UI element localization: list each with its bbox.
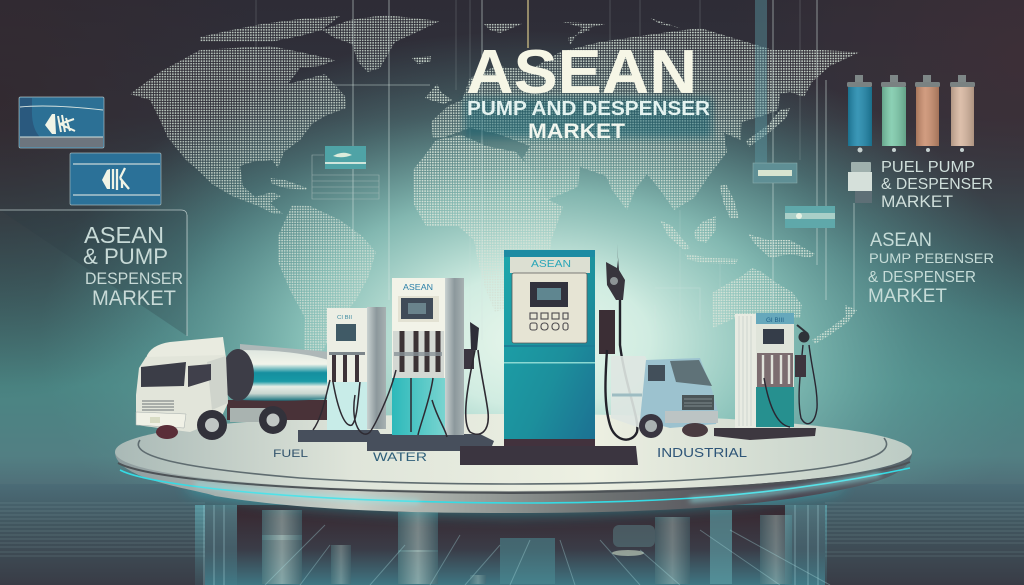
brand plate: ASEAN <box>403 282 433 292</box>
round platform <box>115 414 912 513</box>
pump: right <box>714 313 817 440</box>
cyan light falls <box>195 505 827 585</box>
map: australia <box>712 268 802 328</box>
front panel <box>327 308 367 430</box>
text block: fuel pump and despenser market: PUEL PUMP <box>881 159 975 176</box>
map: canadian arctic <box>200 16 340 42</box>
front panel <box>756 313 794 427</box>
tanker top rail <box>240 344 330 362</box>
windshield <box>670 360 712 386</box>
map: south america <box>278 205 376 376</box>
platform rim <box>115 452 912 513</box>
hose <box>605 300 637 440</box>
left panel text: & PUMP <box>83 244 168 269</box>
cylinder: sand <box>950 75 975 152</box>
map: japan <box>746 108 790 147</box>
pump: large center <box>460 244 638 465</box>
platform label: fuel: FUEL <box>273 448 308 460</box>
side window <box>188 364 211 387</box>
cyan glow line <box>120 468 910 503</box>
hoses <box>313 380 360 430</box>
front panel <box>392 278 445 435</box>
nozzles <box>334 352 357 382</box>
side panel <box>445 278 464 435</box>
map: borneo <box>694 216 716 243</box>
text block: fuel pump and despenser market: & DESPENSER <box>881 176 993 193</box>
side window <box>648 365 665 381</box>
map: north america <box>130 46 346 214</box>
side panel <box>735 314 756 428</box>
tanker chassis <box>227 400 327 420</box>
map: uk <box>425 84 452 104</box>
text block: asean pump market: ASEAN <box>870 230 932 251</box>
display <box>530 282 568 307</box>
tanker truck <box>136 337 335 440</box>
cylinder: copper <box>915 75 940 152</box>
cylinder: blue <box>847 75 872 152</box>
small cylinder <box>848 162 872 203</box>
left panel text <box>83 222 183 310</box>
service truck <box>611 356 718 438</box>
base <box>367 434 494 451</box>
hose <box>764 345 817 427</box>
hoses <box>354 370 447 437</box>
display <box>401 298 433 319</box>
cab roof fairing <box>146 337 226 358</box>
text block: fuel pump and despenser market <box>881 159 993 211</box>
text block: asean pump market <box>868 230 994 307</box>
text block: fuel pump and despenser market: MARKET <box>881 192 953 211</box>
reflective floor <box>0 484 1024 585</box>
map: arctic islands <box>484 18 680 45</box>
left panel text: ASEAN <box>84 222 164 248</box>
text block: asean pump market: PUMP PEBENSER <box>869 250 994 266</box>
dotted world map <box>130 15 860 376</box>
flag card: upper left <box>19 97 104 148</box>
text block: asean pump market: & DESPENSER <box>868 269 976 286</box>
truck cab <box>640 358 718 428</box>
title: asean: ASEAN <box>466 38 697 107</box>
truck box <box>611 356 648 428</box>
cylinders legend <box>847 75 975 152</box>
icon: fishbone mark <box>102 168 129 190</box>
nozzle panel <box>757 353 793 387</box>
cabinet <box>504 250 595 446</box>
icon: fishbone mark <box>45 114 75 134</box>
blue vertical band <box>755 0 767 170</box>
holster and nozzle <box>464 349 474 369</box>
base <box>460 446 638 465</box>
nozzles panel <box>393 331 444 378</box>
vertical grid lines <box>187 0 854 340</box>
mini chart card: atlantic <box>312 146 379 199</box>
map: philippines <box>720 184 739 218</box>
mini card: asia upper <box>753 163 797 183</box>
map: eurasia <box>431 28 860 210</box>
title glow <box>464 98 712 138</box>
flag card: lower left <box>70 153 161 205</box>
platform label: water: WATER <box>373 452 427 464</box>
cylinder: green <box>881 75 906 152</box>
display <box>336 324 356 341</box>
floor stripes <box>0 503 1024 556</box>
map: new zealand <box>812 305 857 344</box>
platform label: industrial: INDUSTRIAL <box>657 445 747 460</box>
platform underside glow <box>190 483 840 508</box>
platform top deck <box>115 414 912 491</box>
tanker body <box>240 350 335 401</box>
windshield <box>141 362 186 387</box>
platform inner ring <box>138 438 887 484</box>
base <box>714 428 816 440</box>
platform lip shadow <box>118 462 910 493</box>
cab body <box>136 355 228 432</box>
title: market: MARKET <box>528 120 625 143</box>
brand plate <box>510 257 590 273</box>
holster and nozzle <box>795 355 806 377</box>
map: greenland <box>322 15 440 72</box>
map: iceland <box>412 56 431 64</box>
left panel text: DESPENSER <box>85 270 183 288</box>
brand plate: CI BII <box>337 315 352 321</box>
title: pump and despenser: PUMP AND DESPENSER <box>467 97 710 120</box>
map: caribbean <box>270 178 307 190</box>
pump: left small <box>298 307 386 442</box>
support pillars <box>262 510 792 584</box>
map: sumatra and java <box>660 220 738 264</box>
nozzle <box>606 244 625 300</box>
display <box>763 329 784 344</box>
mini card: asia lower <box>785 206 835 228</box>
wheels <box>639 414 663 438</box>
holster <box>599 310 615 354</box>
wheels <box>156 425 178 439</box>
grille <box>682 395 714 410</box>
map: new guinea <box>748 234 815 258</box>
grille <box>142 401 174 410</box>
left panel text: MARKET <box>92 287 176 310</box>
brand plate: GI BIII <box>766 318 784 324</box>
text block: asean pump market: MARKET <box>868 286 947 307</box>
front panel <box>512 273 587 343</box>
base <box>298 430 385 442</box>
brand text: ASEAN <box>531 259 571 270</box>
bumper <box>665 411 718 423</box>
floor perspective lines <box>265 525 830 585</box>
outlined text panel: left <box>0 210 187 336</box>
map: africa <box>413 135 563 312</box>
pump: center medium <box>354 278 494 451</box>
title block <box>464 38 712 143</box>
keypad <box>530 313 568 330</box>
bumper <box>136 412 186 428</box>
lower panel <box>756 387 794 427</box>
side panel <box>367 307 386 429</box>
tanker end cap <box>222 349 254 401</box>
